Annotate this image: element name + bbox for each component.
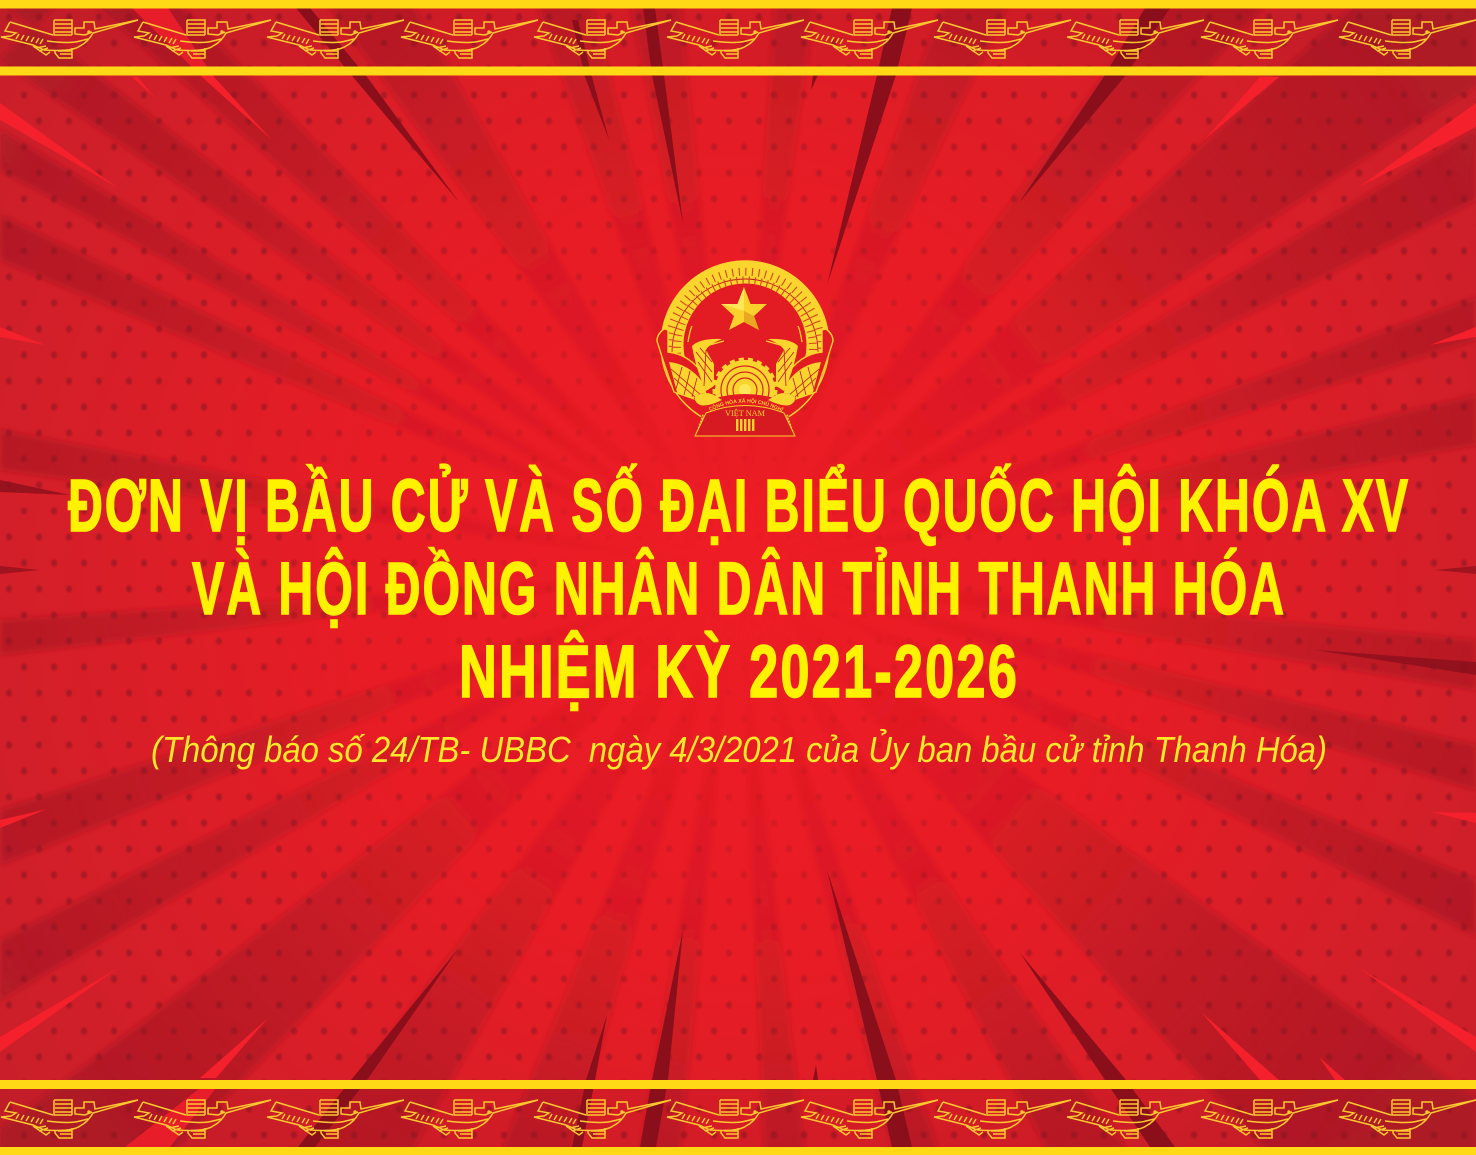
scroll banner (694, 393, 796, 436)
subtitle: (Thông báo số 24/TB- UBBC ngày 4/3/2021 của Ủy ban bầu cử tỉnh Thanh Hóa) (151, 728, 1327, 770)
bird motif row (1, 1100, 1476, 1138)
right wheat and ribbon (755, 326, 833, 436)
bottom decorative border (0, 1080, 1476, 1155)
base stripes (736, 419, 754, 431)
title line 3: NHIỆM KỲ 2021-2026 (459, 630, 1019, 713)
gold star (721, 287, 767, 330)
emblem lettering (709, 398, 784, 418)
title (68, 464, 1410, 713)
left wheat and ribbon (657, 326, 735, 436)
wheat wreath ring (669, 272, 821, 362)
icon: national emblem of Vietnam (656, 260, 834, 436)
bird motif row (1, 20, 1476, 58)
inner red field (685, 285, 805, 405)
top decorative border (0, 0, 1476, 76)
emblem lettering: CỘNG HÒA XÃ HỘI CHỦ NGHĨA (709, 398, 784, 412)
cogwheel (715, 360, 775, 420)
emblem lettering: VIỆT NAM (725, 408, 765, 418)
